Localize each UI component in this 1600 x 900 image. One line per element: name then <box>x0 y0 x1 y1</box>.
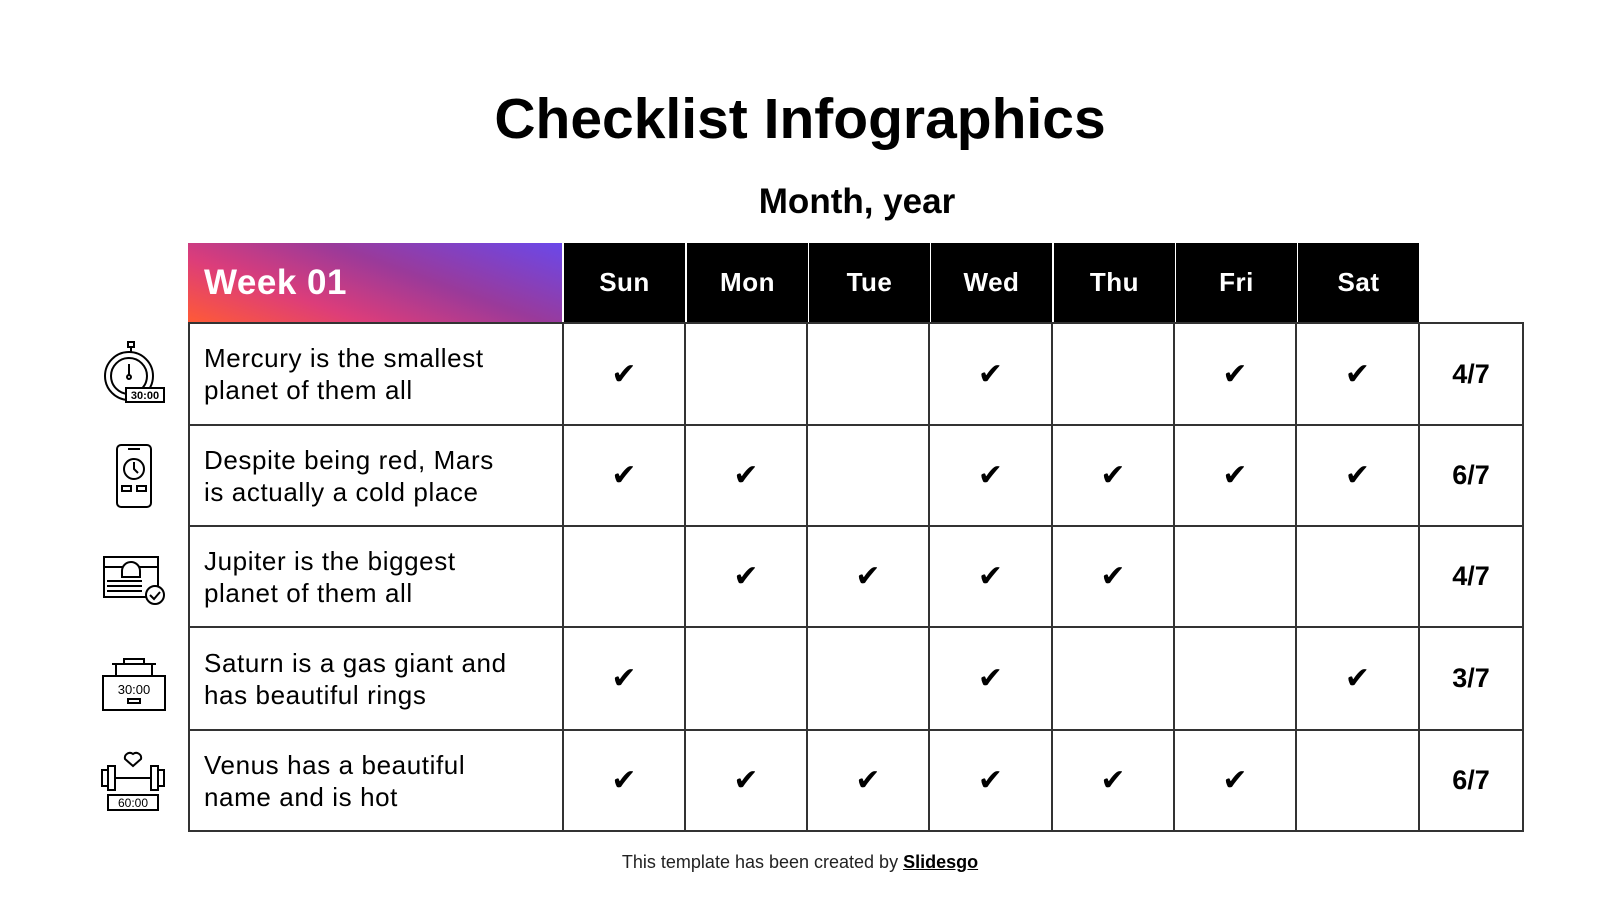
row 4: has beautiful rings <box>204 680 426 710</box>
row 1: 4/7 <box>1452 358 1490 388</box>
row 1: ✔ <box>611 358 637 390</box>
row 2: ✔ <box>978 459 1003 492</box>
row 1: planet of them all <box>204 375 413 405</box>
row 2: ✔ <box>611 459 637 492</box>
row 5: ✔ <box>733 764 759 797</box>
day headers: Tue <box>847 267 892 297</box>
row 3: Jupiter is the biggest <box>204 546 456 576</box>
row 2: is actually a cold place <box>204 476 479 506</box>
row 2: 6/7 <box>1452 460 1490 490</box>
icon: dumbbell heart <box>101 752 165 811</box>
row 4: ✔ <box>978 662 1003 695</box>
icon: dumbbell heart: 60:00 <box>118 796 148 810</box>
icon: cooking pot timer: 30:00 <box>118 682 150 697</box>
day headers: Fri <box>1219 267 1254 297</box>
icon: phone clock <box>116 444 152 508</box>
row 5: Venus has a beautiful <box>204 750 465 780</box>
row 5: name and is hot <box>204 782 398 812</box>
row 1: ✔ <box>978 358 1003 390</box>
row 4: ✔ <box>1345 662 1370 695</box>
row 3: ✔ <box>978 560 1003 593</box>
row 1: Mercury is the smallest <box>204 343 484 373</box>
row 2: ✔ <box>1222 459 1248 492</box>
row 3: ✔ <box>733 560 759 593</box>
icon: stopwatch <box>104 341 165 403</box>
row 4: 3/7 <box>1452 663 1490 693</box>
row 1: ✔ <box>1222 358 1248 390</box>
icon: cooking pot timer <box>102 658 166 711</box>
subtitle: Month, year <box>759 182 955 221</box>
icon: stopwatch: 30:00 <box>131 390 159 402</box>
row 3: ✔ <box>855 560 881 593</box>
row 1: ✔ <box>1345 358 1370 390</box>
day headers <box>564 243 1419 322</box>
row 2: ✔ <box>1345 459 1370 492</box>
day headers: Thu <box>1090 267 1139 297</box>
day headers: Sun <box>599 267 650 297</box>
row 4: ✔ <box>611 662 637 695</box>
row 3: 4/7 <box>1452 561 1490 591</box>
row 5: ✔ <box>855 764 881 797</box>
day headers: Sat <box>1338 267 1379 297</box>
day headers: Mon <box>720 267 775 297</box>
week header: Week 01 <box>204 262 347 302</box>
row 2: ✔ <box>733 459 759 492</box>
row 5: ✔ <box>978 764 1003 797</box>
row 2: Despite being red, Mars <box>204 444 494 474</box>
week header <box>188 243 562 322</box>
row 3: ✔ <box>1100 560 1126 593</box>
row 5: 6/7 <box>1452 765 1490 795</box>
row 5: ✔ <box>611 764 637 797</box>
row 2: ✔ <box>1100 459 1126 492</box>
footer credit: This template has been created by Slidesgo <box>622 852 978 872</box>
day headers: Wed <box>964 267 1019 297</box>
row 4: Saturn is a gas giant and <box>204 648 507 678</box>
row 5: ✔ <box>1100 764 1126 797</box>
title: Checklist Infographics <box>494 87 1106 151</box>
row 3: planet of them all <box>204 578 413 608</box>
row 5: ✔ <box>1222 764 1248 797</box>
icon: bell notification <box>103 556 165 605</box>
